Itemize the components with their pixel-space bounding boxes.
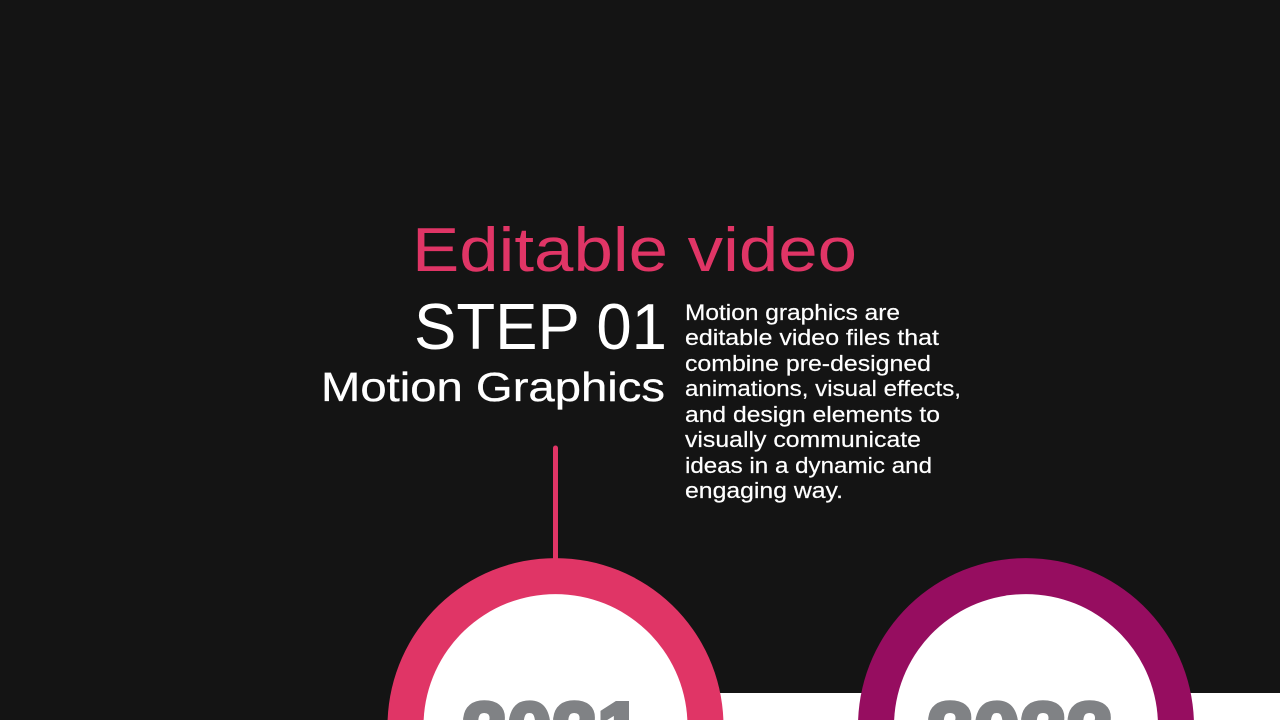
description text: combine pre-designed [685,351,931,376]
white band [700,693,1280,720]
description text [685,300,961,503]
description text: visually communicate [685,427,921,452]
description text: editable video files that [685,325,939,350]
subheading: Motion Graphics [321,364,665,410]
step heading: STEP 01 [414,290,667,363]
description text: engaging way. [685,478,843,503]
description text: Motion graphics are [685,300,900,325]
milestone 2021 [388,558,723,720]
milestone 2022 [858,558,1194,720]
description text: and design elements to [685,402,940,427]
description text: ideas in a dynamic and [685,453,932,478]
title: Editable video [412,216,857,285]
description text: animations, visual effects, [685,376,961,401]
connector line [553,448,558,562]
